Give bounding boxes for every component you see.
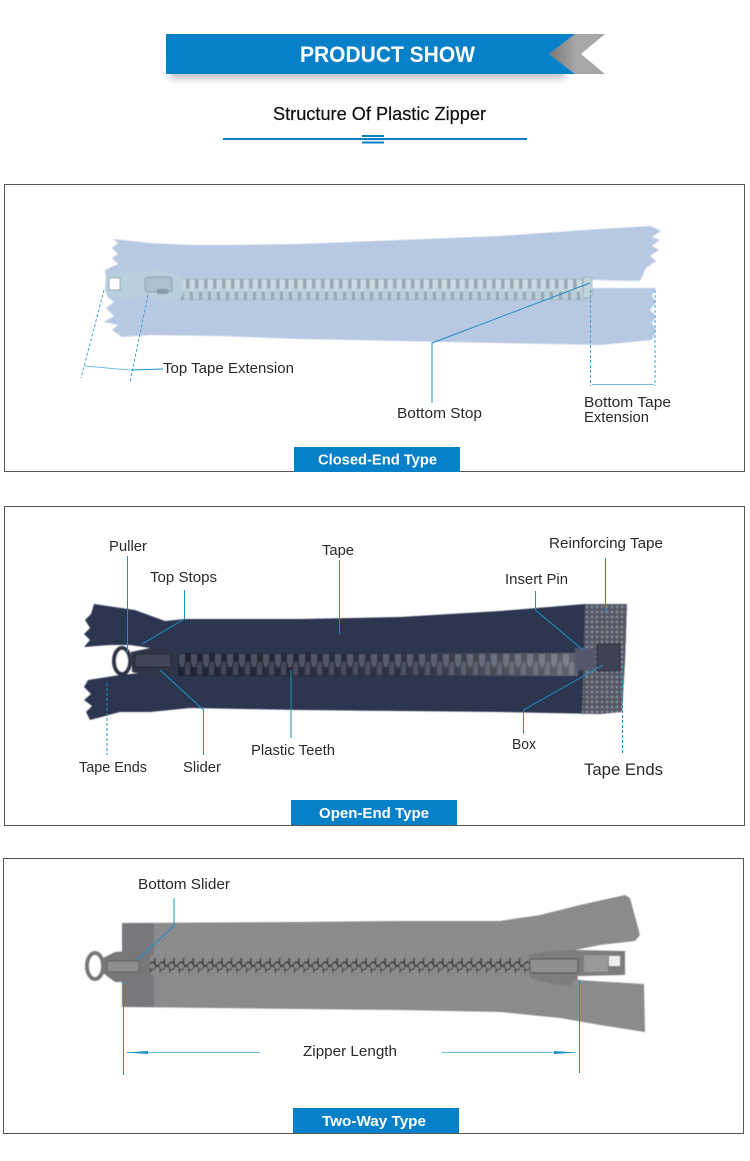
top tape extension callout: [81, 290, 294, 382]
bottom stop callout: [397, 283, 590, 422]
panel: two-way type: [4, 858, 744, 1134]
right tape ends label: Tape Ends: [584, 761, 663, 779]
top slider and puller: [528, 950, 625, 985]
tag: open-end type: Open-End Type: [319, 806, 429, 822]
banner blue ribbon: [166, 34, 575, 74]
tape label: [322, 543, 354, 634]
tag: closed-end type: Closed-End Type: [318, 452, 437, 468]
reinforcing tape label: Reinforcing Tape: [549, 536, 663, 552]
bottom stop: [583, 277, 592, 298]
closed-end zipper: [104, 226, 661, 345]
insert pin label: [505, 572, 583, 650]
banner chevron tail: [549, 34, 605, 74]
header banner: [166, 34, 605, 79]
panel: open-end type: [4, 506, 744, 826]
reinforcing mesh: [582, 604, 627, 714]
box label: [512, 665, 603, 753]
tag: two-way type: [293, 1108, 459, 1133]
light blue tape: [104, 226, 661, 345]
bottom stop callout: Bottom Stop: [397, 406, 482, 422]
bottom slider label: Bottom Slider: [138, 877, 230, 893]
section heading: Structure Of Plastic Zipper: [273, 104, 486, 124]
tape label: Tape: [322, 543, 354, 559]
box label: Box: [512, 737, 537, 753]
tag: closed-end type: [294, 447, 460, 472]
grey tape: [122, 895, 645, 1032]
bottom tape extension callout: [584, 290, 671, 426]
teeth: [178, 653, 578, 676]
heading divider: [223, 135, 527, 144]
two-way zipper: [87, 895, 645, 1032]
insert pin label: Insert Pin: [505, 572, 568, 588]
banner title: PRODUCT SHOW: [300, 42, 475, 67]
zipper length measure: Zipper Length: [303, 1044, 397, 1060]
top tape extension callout: Top Tape Extension: [163, 361, 294, 377]
slider label: [160, 670, 221, 776]
insert pin and box: [575, 644, 620, 671]
top stops label: [142, 570, 217, 644]
bottom tape extension callout: Extension: [584, 410, 649, 426]
bottom tape extension callout: Bottom Tape: [584, 395, 671, 411]
puller label: Puller: [109, 539, 147, 555]
slider label: Slider: [183, 760, 221, 776]
teeth: [180, 279, 586, 300]
reinforcing tape label: [549, 536, 663, 612]
top stops label: Top Stops: [150, 570, 217, 586]
slider: [105, 270, 183, 303]
navy tape: [84, 604, 627, 720]
panel: closed-end type: [4, 184, 744, 472]
open-end zipper: [84, 604, 627, 720]
slider and puller: [114, 646, 178, 678]
teeth: [150, 955, 530, 975]
bottom slider and puller: [87, 950, 150, 982]
bottom slider label: [137, 877, 230, 960]
darker tape reinforcement: [122, 923, 154, 1007]
plastic teeth label: [251, 670, 335, 759]
tag: two-way type: Two-Way Type: [322, 1114, 426, 1130]
left tape ends label: Tape Ends: [79, 760, 147, 776]
left tape ends label: [79, 683, 147, 776]
right tape ends label: [584, 665, 663, 779]
zipper length measure: [124, 980, 580, 1075]
plastic teeth label: Plastic Teeth: [251, 743, 335, 759]
tag: open-end type: [291, 800, 457, 825]
puller label: [109, 539, 147, 652]
